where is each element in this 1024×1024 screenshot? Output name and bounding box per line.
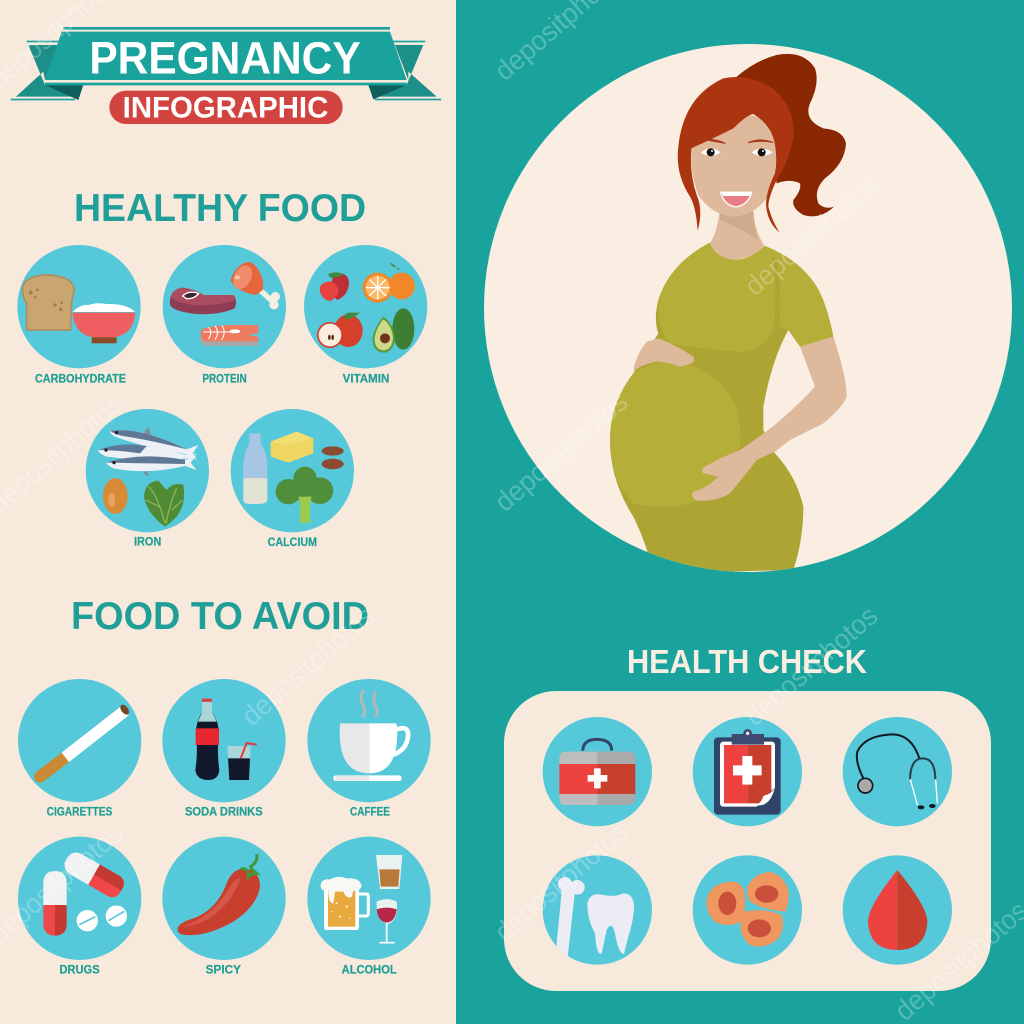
icon: carbohydrate <box>17 245 141 385</box>
dress body <box>610 243 833 573</box>
icon: medical kit <box>543 717 652 826</box>
icon: iron: IRON <box>134 534 161 548</box>
icon: carbohydrate: CARBOHYDRATE <box>35 371 126 385</box>
ribbon band <box>45 32 407 80</box>
heading: health check: HEALTH CHECK <box>627 643 867 680</box>
icon: soda drinks: SODA DRINKS <box>185 805 263 819</box>
icon: iron <box>86 409 209 548</box>
icon: protein: PROTEIN <box>202 371 247 385</box>
heading: food to avoid: FOOD TO AVOID <box>71 595 369 638</box>
icon: cells <box>693 855 802 965</box>
icon: blood drop <box>843 855 952 965</box>
icon: alcohol <box>307 837 431 977</box>
panel: healthy food icons <box>17 245 427 549</box>
icon: stethoscope <box>843 717 952 826</box>
belly <box>610 361 740 507</box>
right arm and hand <box>692 337 847 501</box>
face <box>691 115 777 217</box>
stock photo watermarks: depositphotos <box>739 170 883 302</box>
stock photo watermarks: depositphotos <box>489 816 633 948</box>
hair: front <box>678 77 794 232</box>
icon: cigarettes <box>18 679 141 819</box>
panel: food to avoid icons <box>18 679 431 977</box>
stock photo watermarks: depositphotos <box>739 600 883 732</box>
ribbon tails <box>11 41 441 100</box>
stock photo watermarks: depositphotos <box>236 600 380 732</box>
heading: healthy food: HEALTHY FOOD <box>74 187 366 230</box>
icon: calcium <box>231 409 354 549</box>
icon: soda drinks <box>162 679 286 819</box>
dress bust and sleeve <box>658 243 833 352</box>
left background panel <box>0 0 456 1024</box>
illustration: pregnant woman <box>610 54 847 573</box>
eyes and brows <box>701 139 773 156</box>
icon: vitamin <box>304 245 427 385</box>
infographic pill: INFOGRAPHIC <box>123 91 328 124</box>
icon: spicy <box>162 837 286 977</box>
icon: calcium: CALCIUM <box>268 535 317 549</box>
icon: vitamin: VITAMIN <box>343 371 389 385</box>
icon: cigarettes: CIGARETTES <box>47 805 112 819</box>
icon: drugs <box>18 837 141 977</box>
icon: drugs: DRUGS <box>59 963 100 977</box>
hair: ponytail <box>737 54 846 216</box>
panel: health check card <box>504 691 991 991</box>
left hand on belly <box>633 338 694 372</box>
panel: woman circle <box>484 44 1012 572</box>
icon: caffee <box>307 679 431 819</box>
icon: protein <box>163 245 286 385</box>
right teal background panel <box>456 0 1024 1024</box>
title: PREGNANCY: PREGNANCY <box>89 32 361 83</box>
icon: alcohol: ALCOHOL <box>342 963 397 977</box>
neck <box>710 207 765 260</box>
mouth <box>721 192 752 207</box>
icon: spicy: SPICY <box>206 963 241 977</box>
stock photo watermarks: depositphotos <box>489 386 633 518</box>
icon: medical clipboard <box>693 717 802 826</box>
icon: caffee: CAFFEE <box>350 805 390 819</box>
icon: bone and tooth <box>543 855 652 965</box>
title ribbon banner <box>11 27 441 124</box>
